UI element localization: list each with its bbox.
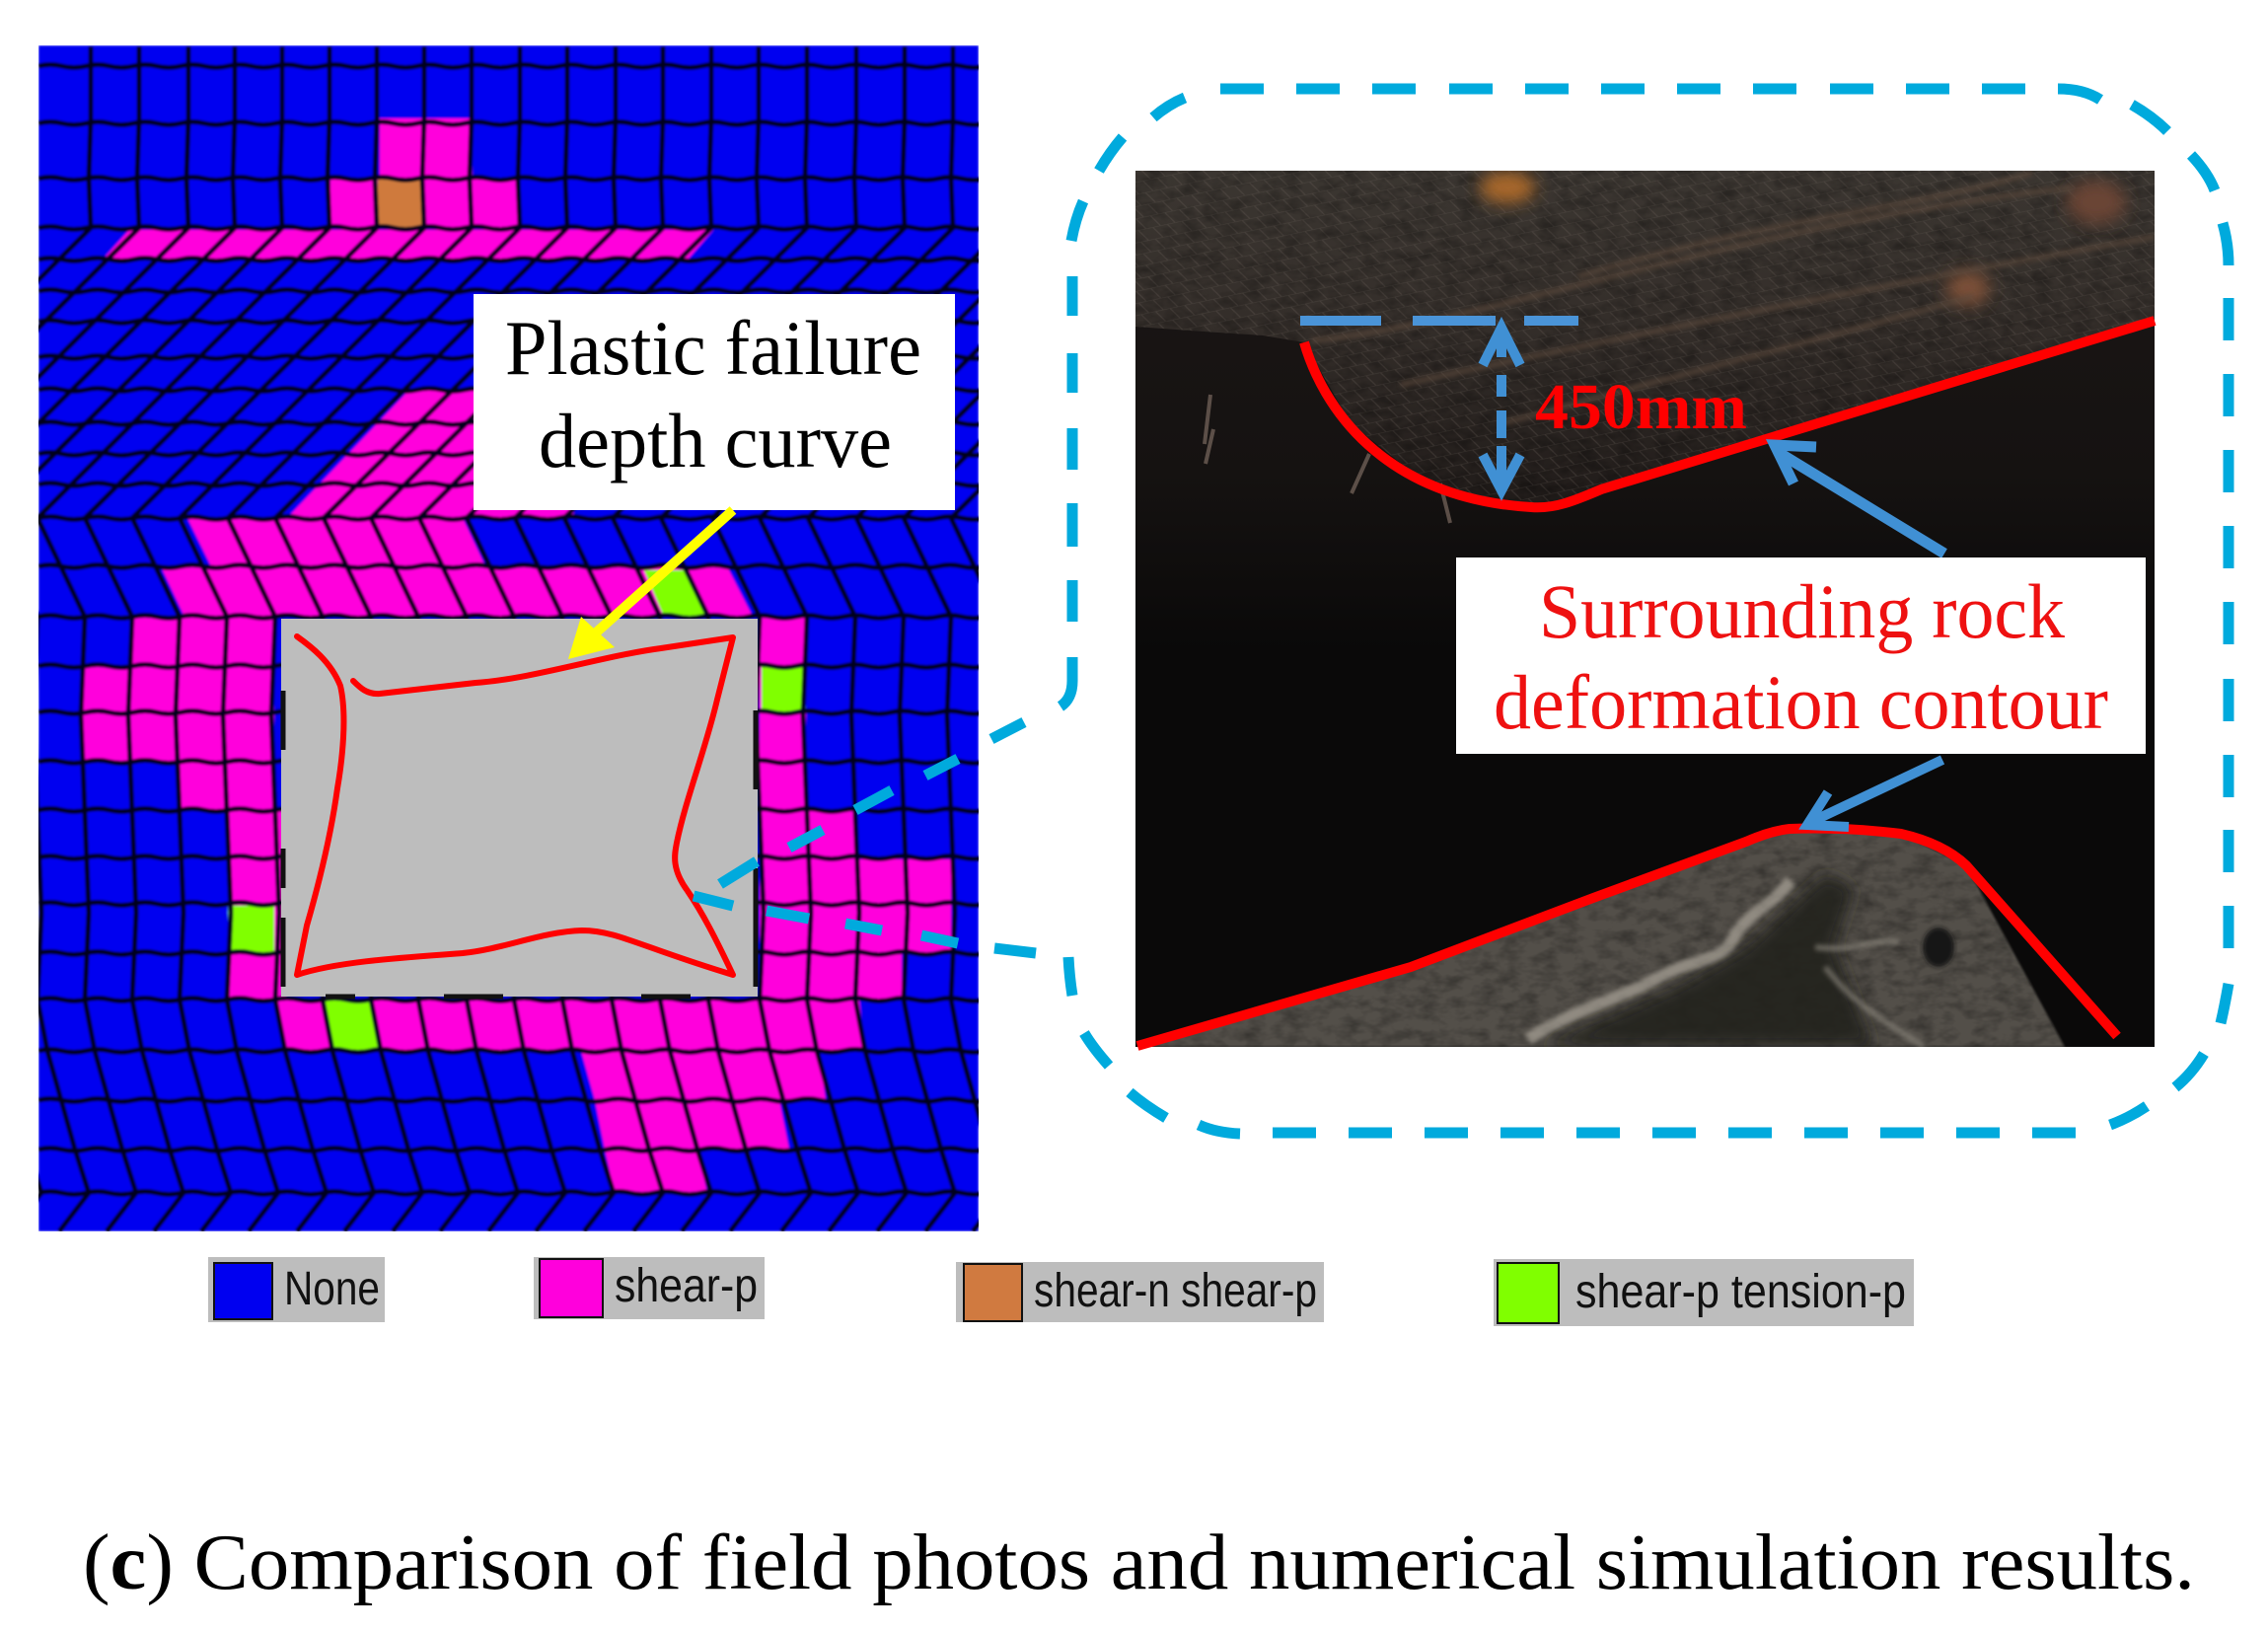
arrow: to floor contour	[1807, 760, 1942, 827]
photo: floor heave rock	[1137, 829, 2065, 1047]
value label: 450mm	[1535, 371, 1747, 443]
deformation contour: roof	[1304, 321, 2155, 507]
legend item: shear-p	[534, 1257, 765, 1319]
label: surrounding rock deformation contour: Surrounding rock	[1539, 568, 2065, 654]
panel: numerical simulation mesh	[38, 45, 979, 1231]
photo background	[1135, 171, 2155, 1047]
mesh background: elements with no failure	[38, 45, 979, 1231]
label: plastic failure depth curve	[474, 294, 955, 510]
dashed rounded frame around the photo	[1061, 89, 2229, 1134]
legend item: None	[208, 1257, 385, 1322]
label: surrounding rock deformation contour: deformation contour	[1494, 659, 2108, 745]
photo: bolts on the rib	[1205, 395, 1450, 523]
legend item: shear-n shear-p	[956, 1262, 1324, 1322]
double arrow: 450 mm displacement	[1483, 328, 1520, 490]
arrow: yellow pointer to the curve	[568, 510, 733, 659]
reference dashed line	[1300, 316, 1578, 326]
label: plastic failure depth curve: depth curve	[539, 398, 892, 483]
legend item: shear-p tension-p: shear-p tension-p	[1575, 1266, 1906, 1318]
legend item: None: None	[284, 1263, 380, 1315]
plastic failure depth curve	[297, 636, 733, 975]
arrow: to roof contour	[1775, 445, 1944, 554]
label: surrounding rock deformation contour	[1456, 557, 2146, 754]
legend item: shear-n shear-p: shear-n shear-p	[1034, 1265, 1317, 1317]
label: plastic failure depth curve: Plastic failure	[505, 305, 921, 391]
deformation contour: floor	[1137, 829, 2117, 1046]
caption: (c) Comparison of field photos and numerical simulation results.	[83, 1520, 2195, 1606]
legend item: shear-p tension-p	[1494, 1259, 1914, 1326]
legend item: shear-p: shear-p	[615, 1260, 758, 1312]
legend	[208, 1257, 1914, 1326]
tunnel opening	[281, 619, 758, 997]
panel: field photo	[1135, 171, 2155, 1047]
photo: dark rib and roof with mesh netting	[1135, 171, 2155, 1047]
connector: dashed leader from tunnel to photo	[694, 722, 1036, 953]
